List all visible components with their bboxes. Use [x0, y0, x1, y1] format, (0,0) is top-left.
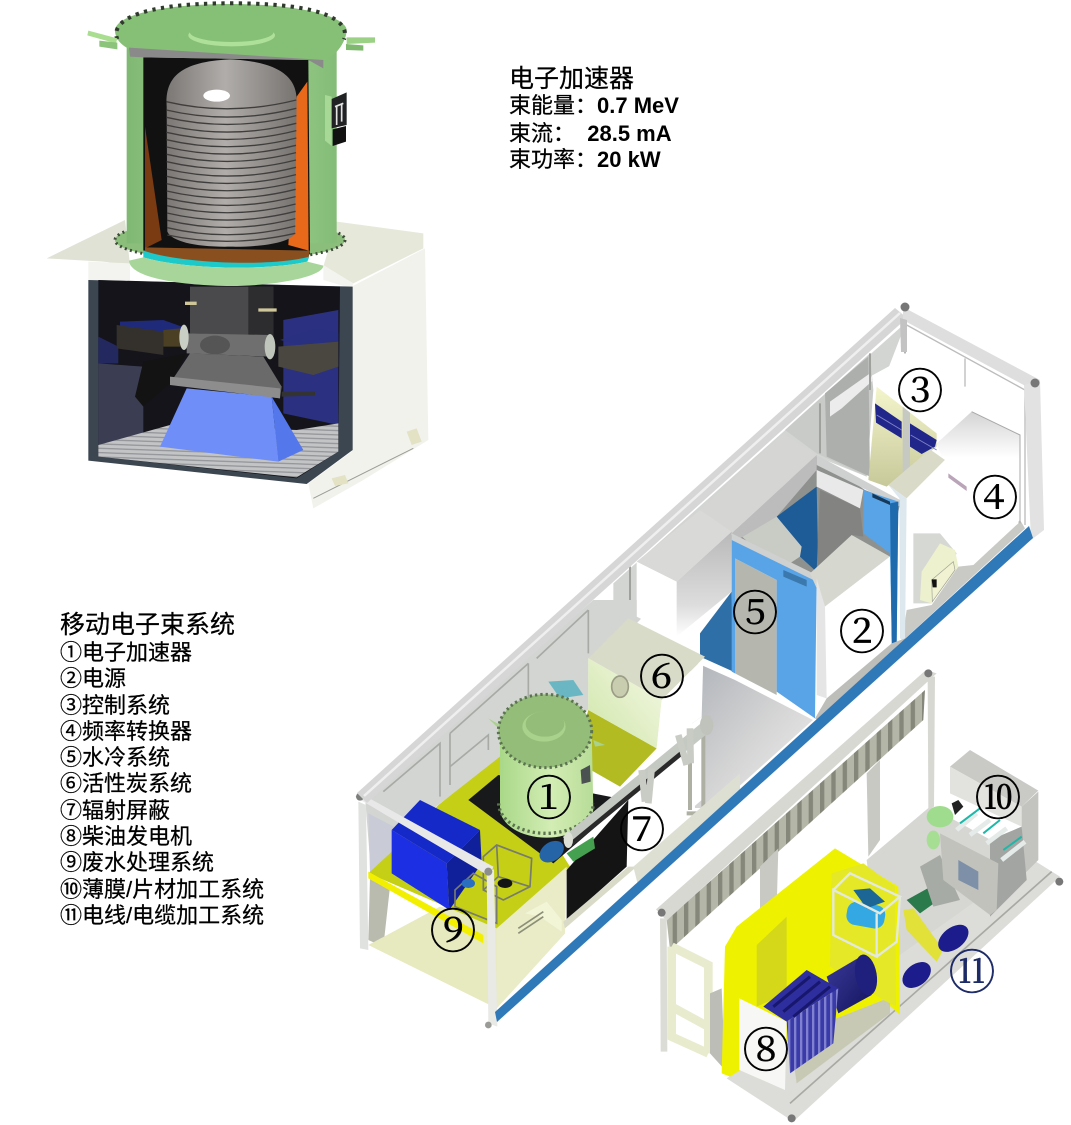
film machine plate [940, 833, 998, 915]
interior dark blue walls [700, 487, 863, 672]
number markers [430, 355, 1022, 1081]
white end wall [880, 325, 1025, 640]
yellow enclosure [722, 848, 900, 1083]
tall duct cabinet [888, 449, 958, 642]
blue motor [535, 832, 573, 867]
yellow couplers [903, 908, 943, 962]
marker 1: ① [526, 762, 572, 829]
radiator [763, 970, 838, 1073]
radiation shield box [563, 800, 637, 928]
housing frame [88, 280, 353, 484]
green winder [907, 855, 960, 913]
air compressor [833, 873, 900, 957]
marker 8: ⑧ [742, 1014, 790, 1081]
vessel body [127, 47, 337, 254]
right magnet block [278, 328, 338, 375]
top and end beams [357, 307, 1044, 803]
partition top rail [817, 455, 900, 507]
pale floor [368, 907, 565, 1008]
teal pump [548, 680, 583, 698]
lower flange ring [115, 219, 345, 261]
marker 2: ② [838, 596, 886, 663]
corner fittings [900, 302, 1040, 388]
film rollers [927, 800, 1025, 860]
back wall [613, 323, 907, 623]
blue motors [897, 919, 974, 993]
main container [355, 302, 1044, 1028]
lower flange [129, 257, 323, 286]
wastewater skid [455, 845, 532, 923]
pit opening [468, 775, 627, 863]
chamber interior [98, 280, 340, 478]
marker 5: ⑤ [732, 577, 778, 644]
beam power spec: 束功率：20 kW [509, 147, 661, 172]
back wall front [365, 600, 637, 860]
front frame [355, 793, 497, 1028]
marker 3: ③ [896, 355, 944, 422]
floor rail [815, 638, 908, 722]
room behind doors [732, 457, 900, 577]
marker 10: ⑩ [974, 762, 1022, 829]
frequency converter [937, 412, 1020, 565]
base plate [145, 247, 310, 265]
beam scan pyramid [160, 388, 303, 462]
ceiling cabinet [700, 433, 817, 538]
accelerator tube and scan horn [170, 287, 315, 398]
blue floor rail [495, 526, 1033, 1022]
lower wall [368, 877, 390, 947]
left magnet block [117, 320, 187, 407]
end wall [368, 813, 407, 873]
corner fittings [658, 669, 1063, 1122]
right blue door [863, 490, 898, 643]
cream rack [672, 947, 725, 1070]
shield face [497, 867, 567, 1008]
generator container [656, 669, 1063, 1122]
housing bottom latches [313, 428, 422, 498]
generator cylinder [827, 953, 880, 1013]
left blue door [732, 533, 817, 718]
center floor [690, 660, 813, 808]
orange insulation [145, 82, 309, 251]
blue tank [392, 800, 482, 910]
service floor [902, 520, 1025, 642]
lid [87, 3, 375, 61]
platform yellow deck [368, 757, 570, 928]
front section [355, 600, 740, 1028]
housing right side [308, 248, 428, 508]
light fixture [817, 470, 863, 508]
shield rail floor [633, 773, 740, 887]
film machine housing [950, 750, 1038, 917]
power supply cabinet [810, 535, 892, 698]
wall panels rear [630, 323, 905, 610]
lid cut face [129, 48, 323, 68]
accelerator vessel [488, 694, 605, 838]
top beam [656, 670, 937, 921]
marker 9: ⑨ [430, 895, 476, 962]
bright edge [368, 872, 483, 943]
doorway opening [735, 558, 777, 695]
end wall lines [905, 325, 1025, 525]
marker 7: ⑦ [618, 794, 666, 861]
control box on vessel [325, 92, 347, 146]
posts [660, 677, 935, 1052]
electron accelerator cutaway [47, 3, 428, 508]
system list heading: 移动电子束系统 [60, 611, 235, 639]
olive rear deck [573, 710, 657, 787]
system component list: ①电子加速器 ②电源 ③控制系统 ④频率转换器 ⑤水冷系统 ⑥活性炭系统 ⑦辐射屏蔽 ⑧柴油发电机 ⑨废水处理系统 ⑩薄膜/片材加工系统 ⑪电线/电缆加工系统 [60, 640, 264, 928]
beam energy spec: 束能量：0.7 MeV [509, 93, 679, 118]
beam current spec: 束流： 28.5 mA [509, 121, 672, 146]
white wall cabinet [637, 510, 732, 637]
container interior [362, 320, 1030, 1018]
wall panels [383, 610, 588, 797]
dome tank [166, 59, 297, 247]
exhaust pipe [567, 715, 713, 845]
control cabinet [868, 387, 937, 487]
cyan seal ring [143, 251, 309, 268]
marker 6: ⑥ [638, 641, 686, 708]
white engine plate [739, 998, 787, 1090]
accelerator spec heading: 电子加速器 [509, 65, 634, 93]
mounting plate [47, 220, 423, 288]
skid deck [727, 807, 1060, 1122]
rear section in zoom coordinates [613, 323, 1025, 722]
activated carbon tank [588, 618, 705, 853]
container floor [667, 793, 1063, 1122]
marker 4: ④ [972, 462, 1018, 529]
marker 11: ⑪ [948, 936, 996, 1003]
ventilation grille [667, 690, 925, 950]
